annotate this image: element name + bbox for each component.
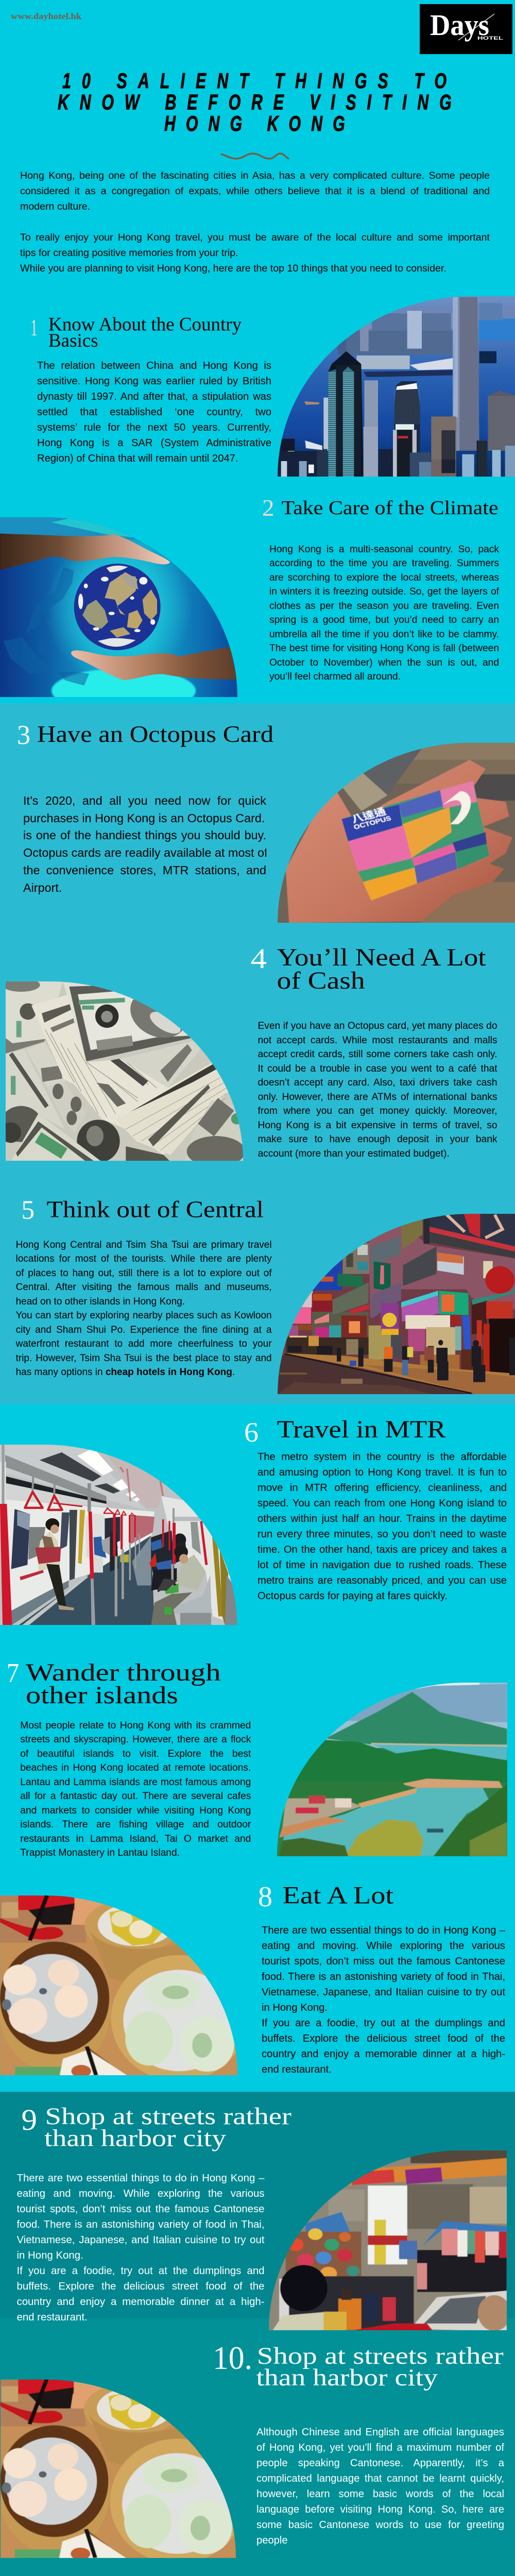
heading 4: of Cash: [277, 967, 365, 994]
panel: 2 take care of the climate: [0, 495, 499, 713]
text 9: If you are a foodie, try out at the dumplings and: [16, 2265, 265, 2277]
text 4: make sure to have enough deposit in your bank: [258, 1134, 497, 1145]
text 6: The metro system in the country is the affordable: [258, 1451, 507, 1462]
text 10: some basic Cantonese words to use for greeting: [256, 2519, 504, 2531]
text 6: [258, 1449, 507, 1608]
text 1: sensitive. Hong Kong was earlier ruled by British: [37, 375, 271, 386]
text 7: of beautiful islands to visit. Explore the best: [20, 1749, 251, 1759]
panel: 6 travel in mtr: [0, 1416, 507, 1625]
text 2: you’ll feel charmed all around.: [269, 671, 401, 682]
text 10: of Hong Kong, yet you’ll find a maximum number of: [256, 2442, 504, 2453]
text 6: lot of time in navigation due to rushed roads. These: [258, 1559, 507, 1570]
text 5: of places to hang out, still there is a lot to explore out of: [16, 1267, 272, 1279]
text 7: streets and skyscraping. However, there are a flock: [20, 1734, 251, 1745]
title: KNOW BEFORE VISITING: [58, 90, 452, 114]
text 1: Hong Kong is a SAR (System Administrative: [37, 437, 271, 448]
text 10: people speaking Cantonese. Apparently, it’s a: [256, 2458, 504, 2469]
text 8: [262, 1923, 505, 2082]
text 4: from where you can get money quickly. Moreover,: [258, 1106, 497, 1116]
text 8: country and enjoy a memorable dinner at a high-: [262, 2048, 505, 2060]
text 5: Hong Kong Central and Tsim Sha Tsui are primary travel: [16, 1240, 272, 1250]
text 7: islands. There are fishing village and outdoor: [20, 1819, 251, 1830]
text 3: Airport.: [23, 881, 62, 894]
text 1: systems’ rule for the next 50 years. Currently,: [37, 421, 271, 433]
globe: [74, 564, 161, 650]
text 2: according to the time you are traveling. Summers: [269, 558, 499, 569]
text 8: There are two essential things to do in Hong Kong –: [262, 1925, 505, 1936]
text 2: The best time for visiting Hong Kong is fall (between: [269, 643, 499, 654]
panel: 10 shop at streets: [0, 2340, 504, 2564]
text 6: time. On the other hand, taxis are pricey and takes a: [258, 1544, 507, 1555]
image: green islands and bay: [276, 1682, 509, 1857]
text 8: food. There is an astonishing variety of food in Thai,: [262, 1971, 505, 1982]
text 7: and markets to consider while visiting Hong Kong: [20, 1805, 251, 1816]
text 5: head on to other islands in Hong Kong.: [16, 1296, 185, 1307]
text 7: Lantau and Lamma islands are most famous among: [20, 1776, 251, 1788]
text 9: in Hong Kong.: [16, 2250, 83, 2261]
text 4: [258, 1019, 497, 1163]
panel: 4 you'll need a lot of cash: [1, 943, 497, 1167]
image: Ladies Market street: [268, 2150, 511, 2331]
image: octopus card in hand: 八達通: [350, 806, 388, 825]
text 3: [23, 792, 266, 898]
text 5: waterfront restaurant to add more cheerfulness to your: [16, 1338, 272, 1349]
text 5: city and Sham Shui Po. Experience the fine dining at a: [16, 1324, 272, 1335]
text 7: beaches in Hong Kong located at remote locations.: [20, 1762, 251, 1773]
wavy divider: [221, 154, 289, 159]
text 8: If you are a foodie, try out at the dumplings and: [262, 2018, 505, 2029]
text 1: settled that established ‘one country, two: [37, 406, 271, 417]
text 7: all for a fantastic day out. There are several cafes: [20, 1791, 251, 1802]
text 2: clothes as per the season you are traveling. Even: [269, 601, 499, 611]
text 9: eating and moving. While exploring the various: [16, 2188, 265, 2199]
number 1: 1: [30, 314, 38, 341]
text 4: Even if you have an Octopus card, yet many places do: [258, 1021, 497, 1031]
image: stack of dollar bills: [1, 978, 245, 1167]
text 10: Although Chinese and English are official languages: [256, 2427, 504, 2438]
text 3: is one of the handiest things you should buy.: [23, 828, 266, 842]
text 4: only. However, there are ATMs of international banks: [258, 1091, 497, 1103]
panel: 1 know about the country basics: [30, 296, 515, 477]
text 8: eating and moving. While exploring the various: [262, 1940, 505, 1952]
text 2: October to November) when the sun is out, and: [269, 657, 499, 668]
number 6: 6: [244, 1417, 259, 1448]
text 6: move in MTR offering efficiency, cleanliness, and: [258, 1482, 507, 1493]
image: dim sum steamers: [0, 2380, 245, 2564]
text 3: Octopus cards are readily available at most of: [23, 846, 266, 859]
panel: header: [11, 4, 512, 281]
text 9: tourist spots, don’t miss out the famous Cantonese: [16, 2204, 265, 2215]
heading 7: Wander through: [26, 1659, 221, 1686]
text 10: [256, 2425, 504, 2553]
text 9: There are two essential things to do in Hong Kong –: [16, 2173, 265, 2184]
text 5: locations for most of the tourists. While there are plenty: [16, 1253, 272, 1264]
text 7: Trappist Monastery in Lantau Island.: [20, 1848, 180, 1858]
text 9: Vietnamese, Japanese, and Italian cuisine to try out: [16, 2234, 265, 2246]
text 6: others within just half an hour. Trains in the daytime: [258, 1513, 507, 1524]
heading 1: Know About the Country: [48, 314, 242, 335]
text 2: [269, 542, 499, 686]
text 2: Hong Kong is a multi-seasonal country. So, pack: [269, 544, 499, 554]
heading 10: than harbor city: [256, 2364, 438, 2391]
text 5: has many options in cheap hotels in Hong Kong.: [16, 1367, 235, 1378]
heading 4: You’ll Need A Lot: [277, 944, 486, 971]
number 10: 10.: [213, 2340, 252, 2376]
text 8: end restaurant.: [262, 2064, 332, 2075]
text 2: are scorching to explore the local streets, whereas: [269, 572, 499, 583]
heading 6: Travel in MTR: [277, 1416, 446, 1443]
text 2: in winters it is freezing outside. So, get the layers of: [269, 586, 499, 597]
text 8: buffets. Explore the delicious street food of the: [262, 2033, 505, 2044]
intro text: [20, 168, 490, 281]
text 2: spring is a good time, but you’d need to carry an: [269, 615, 499, 625]
text 10: language before visiting Hong Kong. So, here are: [256, 2504, 504, 2515]
heading 7: other islands: [26, 1682, 178, 1709]
intro text: While you are planning to visit Hong Kong, here are the top 10 things that you need to consider.: [20, 263, 447, 274]
text 5: trip. However, Tsim Sha Tsui is the best place to stay and: [16, 1353, 272, 1363]
text 3: the convenience stores, MTR stations, and: [23, 863, 266, 877]
number 8: 8: [258, 1881, 272, 1913]
panel: 9 shop at streets: [16, 2103, 511, 2331]
text 9: country and enjoy a memorable dinner at a high-: [16, 2296, 265, 2308]
heading 10: Shop at streets rather: [257, 2343, 504, 2369]
text 6: run every three minutes, so you don’t need to waste: [258, 1528, 507, 1539]
text 10: however, learn some basic words of the local: [256, 2488, 504, 2500]
heading 2: Take Care of the Climate: [281, 497, 499, 519]
panel: 7 wander through other islands: [7, 1658, 509, 1863]
intro text: modern culture.: [20, 201, 90, 212]
number 7: 7: [7, 1658, 19, 1688]
text 8: Vietnamese, Japanese, and Italian cuisine to try out: [262, 1987, 505, 1998]
image: globe between hands: [0, 517, 237, 713]
text 9: [16, 2171, 265, 2330]
title: 10 SALIENT THINGS TO: [62, 69, 447, 93]
number 9: 9: [22, 2103, 37, 2137]
text 9: end restaurant.: [16, 2312, 88, 2323]
logo: Days Hotel: HOTEL: [477, 36, 503, 41]
text 4: Hong Kong is a bit expensive in terms of travel, so: [258, 1120, 497, 1130]
text 5: You can start by exploring nearby places such as Kowloon: [16, 1310, 272, 1321]
text 1: Region) of China that will remain until 2047.: [37, 452, 238, 464]
image: octopus card in hand: [276, 741, 515, 924]
heading 5: Think out of Central: [46, 1196, 264, 1222]
text 4: It could be a trouble in case you went to a café that: [258, 1063, 497, 1074]
text 7: restaurants in Lamma Island, Tai O market and: [20, 1833, 251, 1844]
text 5: [16, 1238, 272, 1382]
logo: Days Hotel: Days: [430, 8, 489, 42]
text 4: doesn’t accept any card. Also, taxi drivers take cash: [258, 1077, 497, 1088]
text 8: tourist spots, don’t miss out the famous Cantonese: [262, 1956, 505, 1967]
heading 1: Basics: [48, 330, 98, 351]
heading 3: Have an Octopus Card: [37, 721, 273, 747]
text 10: people: [256, 2535, 288, 2546]
text 6: Octopus cards for paying at fares quickly.: [258, 1590, 448, 1601]
image: MTR train interior: [0, 1445, 237, 1625]
number 5: 5: [22, 1195, 35, 1225]
text 8: in Hong Kong.: [262, 2002, 328, 2013]
intro text: To really enjoy your Hong Kong travel, you must be aware of the local culture and some important: [20, 232, 490, 243]
intro text: Hong Kong, being one of the fascinating cities in Asia, has a very complicated culture. Some people: [20, 170, 490, 181]
intro text: tips for creating positive memories from your trip.: [20, 247, 238, 259]
text 1: dynasty till 1997. And after that, a stipulation was: [37, 391, 271, 402]
heading 9: Shop at streets rather: [45, 2103, 291, 2130]
text 1: [37, 358, 271, 469]
text 4: accept credit cards, still some corners take cash only.: [258, 1049, 497, 1060]
website label: www.dayhotel.hk: [11, 11, 82, 21]
title: [58, 69, 452, 135]
text 2: umbrella all the time if you don’t like to be clammy.: [269, 629, 499, 640]
text 7: [20, 1719, 251, 1863]
number 2: 2: [262, 495, 274, 521]
heading 8: Eat A Lot: [282, 1882, 394, 1909]
text 9: food. There is an astonishing variety of food in Thai,: [16, 2219, 265, 2230]
image: dim sum steamers: [0, 1895, 247, 2081]
text 6: speed. You can reach from one Hong Kong island to: [258, 1497, 507, 1509]
image: neon street: [278, 1214, 515, 1394]
text 7: Most people relate to Hong Kong with its crammed: [20, 1720, 251, 1731]
text 1: The relation between China and Hong Kong is: [37, 360, 271, 371]
image: octopus card in hand: OCTOPUS: [352, 814, 392, 831]
text 5: Central. After visiting the famous malls and museums,: [16, 1282, 272, 1293]
text 10: complicated language that cannot be learnt quickly,: [256, 2473, 504, 2484]
title: HONG KONG: [164, 111, 345, 135]
heading 9: than harbor city: [44, 2125, 227, 2152]
image: Hong Kong skyline: [278, 296, 515, 477]
number 4: 4: [250, 943, 267, 974]
logo: Days Hotel: [420, 4, 512, 54]
text 6: metro trains are reasonably priced, and you can use: [258, 1574, 507, 1586]
text 4: account (more than your estimated budget).: [258, 1148, 450, 1159]
panel: 5 think out of central: [16, 1195, 515, 1394]
text 4: not accept cards. While most restaurants and malls: [258, 1035, 497, 1046]
text 3: It’s 2020, and all you need now for quick: [23, 794, 266, 807]
text 9: buffets. Explore the delicious street food of the: [16, 2281, 265, 2292]
text 6: and amusing option to Hong Kong travel. It is fun to: [258, 1466, 507, 1478]
number 3: 3: [17, 720, 30, 750]
lower hand: [71, 647, 237, 680]
panel: 8 eat a lot: [0, 1881, 505, 2082]
intro text: considered it as a congregation of expats, while others believe that it is a blend of traditional and: [20, 185, 490, 197]
panel: 3 have an octopus card: [17, 720, 515, 924]
upper hand: [0, 534, 170, 570]
